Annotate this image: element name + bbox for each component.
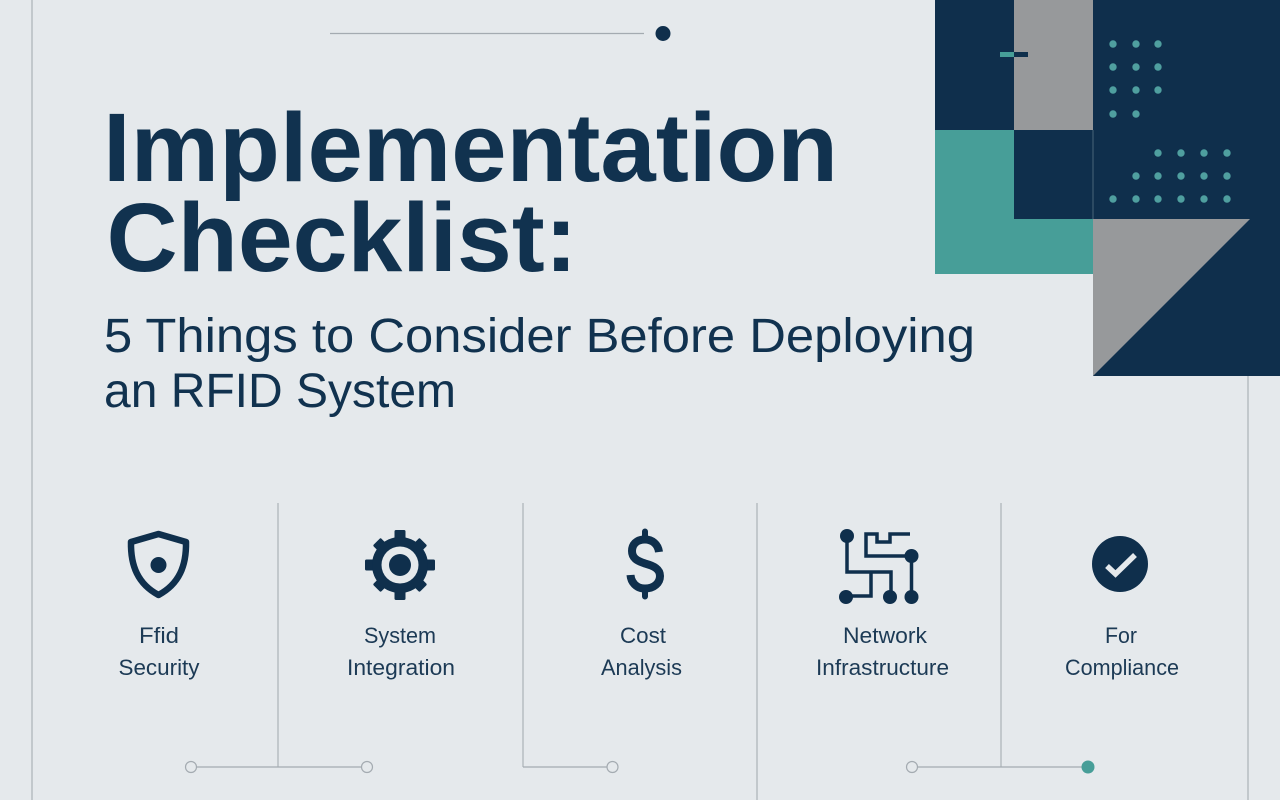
label: Network Infrastructure: Infrastructure xyxy=(816,655,949,680)
column: cost analysis xyxy=(601,532,682,680)
subtitle: an RFID System xyxy=(104,365,456,418)
label: Ffid Security: Ffid xyxy=(139,623,179,648)
column: compliance xyxy=(1065,536,1179,680)
label: For Compliance xyxy=(1065,623,1179,680)
label: Cost Analysis: Analysis xyxy=(601,655,682,680)
timeline connector: left xyxy=(186,762,372,772)
label: Network Infrastructure xyxy=(816,623,949,680)
title: Checklist: xyxy=(106,183,578,292)
icon: circuit network xyxy=(839,529,918,604)
label: Cost Analysis xyxy=(601,623,682,680)
icon: dollar sign xyxy=(630,532,660,596)
column: network infrastructure xyxy=(816,529,949,680)
label: System Integration: System xyxy=(364,623,436,648)
label: Network Infrastructure: Network xyxy=(843,623,928,648)
timeline connector: right with teal end point xyxy=(906,760,1094,774)
top rule with dot xyxy=(330,26,670,41)
subtitle: 5 Things to Consider Before Deploying xyxy=(104,310,975,363)
label: For Compliance: Compliance xyxy=(1065,655,1179,680)
label: System Integration: Integration xyxy=(347,655,455,680)
title xyxy=(103,93,838,292)
label: Ffid Security: Security xyxy=(118,655,200,680)
geometric decoration xyxy=(935,0,1280,376)
icon: gear xyxy=(365,530,435,600)
title: Implementation xyxy=(103,93,838,202)
subtitle xyxy=(104,310,975,418)
icon: shield xyxy=(131,534,186,595)
label: Cost Analysis: Cost xyxy=(620,623,666,648)
label: System Integration xyxy=(347,623,455,680)
label: Ffid Security xyxy=(118,623,200,680)
column: RFID security xyxy=(118,534,200,680)
column: system integration xyxy=(347,530,455,680)
timeline connector: middle xyxy=(523,762,618,772)
icon: check badge xyxy=(1092,536,1148,592)
label: For Compliance: For xyxy=(1105,623,1137,648)
